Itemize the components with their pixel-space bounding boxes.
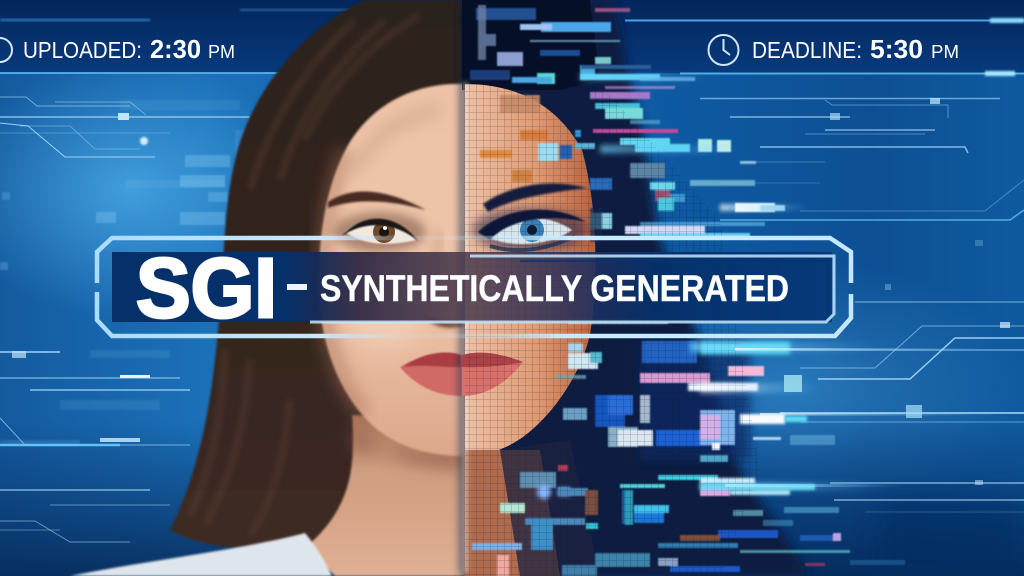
- top status band: [0, 0, 1024, 76]
- uploaded time label: [0, 34, 235, 64]
- title: SGI: SGI: [136, 241, 277, 335]
- glowing light streaks: [580, 74, 1000, 491]
- woman's hair: [170, 0, 470, 548]
- left background data blocks: [0, 100, 247, 446]
- right eyebrow: [483, 183, 587, 212]
- right lips: [462, 353, 523, 396]
- woman's face, natural half: [319, 84, 497, 456]
- deadline time: 5:30: [870, 34, 923, 64]
- deadline text: DEADLINE:: [752, 37, 862, 63]
- uploaded time: 2:30: [150, 34, 201, 64]
- title dash: [287, 284, 307, 290]
- deadline time label: [708, 34, 959, 65]
- left eye: [334, 212, 426, 252]
- right circuit traces: [700, 98, 1024, 512]
- left eyebrow: [328, 192, 426, 210]
- banner panel: [112, 252, 832, 322]
- mosaic grid overlay: [465, 84, 760, 576]
- uploaded text: UPLOADED:: [23, 37, 142, 63]
- nose: [418, 310, 497, 327]
- icon: clock cut off at left: [0, 38, 12, 62]
- lips: [400, 353, 462, 396]
- dark digital hair, disintegrating half: [462, 0, 810, 576]
- left circuit traces: [0, 97, 250, 542]
- deadline pm: PM: [931, 42, 959, 62]
- title banner: [97, 238, 851, 336]
- title: synthetically generated: SYNTHETICALLY GENERATED: [320, 268, 789, 309]
- banner outer bracket: [97, 238, 851, 336]
- banner inner frame: [310, 256, 834, 322]
- pixelated half of the face: [462, 82, 600, 576]
- icon: clock: [708, 35, 738, 65]
- data pixel blocks: [470, 5, 905, 576]
- uploaded pm: PM: [208, 42, 235, 62]
- woman's neck and shoulder: [70, 415, 470, 576]
- right eye: [472, 208, 588, 252]
